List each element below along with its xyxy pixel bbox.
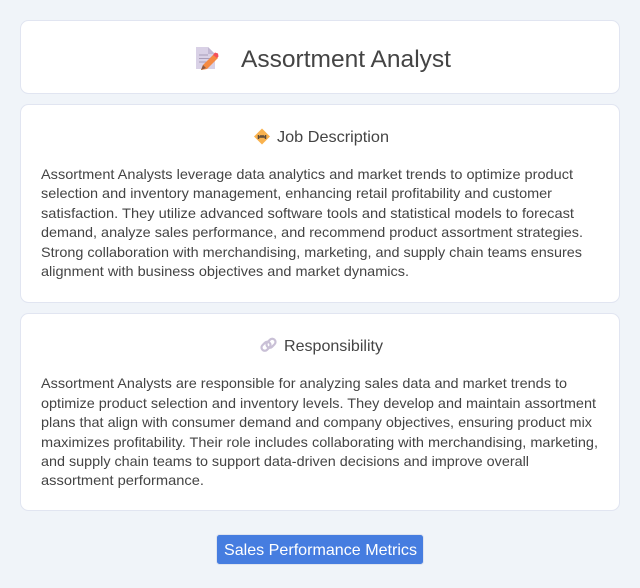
- text block: job description: [41, 166, 583, 279]
- button: sales performance metrics: [216, 534, 424, 564]
- text block: responsibility: Assortment Analysts are responsible for analyzing sales data and market trends to: [41, 375, 567, 391]
- text block: responsibility: [41, 375, 598, 488]
- icon: chain link: [260, 337, 277, 352]
- icon: diamond sign: [254, 128, 270, 144]
- panel: responsibility: [20, 314, 620, 510]
- text block: job description: demand, analyze sales performance, and recommend product assortment strategies.: [41, 224, 583, 240]
- heading: page title: Assortment Analyst: [241, 46, 451, 73]
- icon: document with pencil: [196, 47, 218, 70]
- text block: job description: satisfaction. They utilize advanced software tools and statistical models to forecast: [41, 205, 574, 221]
- text block: responsibility: plans that align with consumer demand and company objectives, ensuring product mix: [41, 414, 592, 430]
- text block: responsibility: assortment performance.: [41, 472, 204, 488]
- text block: responsibility: maximizes profitability. Their role includes collaborating with merchandising, marketing,: [41, 434, 598, 450]
- button: sales performance metrics: Sales Performance Metrics: [224, 542, 417, 559]
- text block: responsibility: optimize product selection and inventory levels. They develop and maintain assortment: [41, 395, 596, 411]
- panel: job description: [20, 104, 620, 302]
- heading: job description: Job Description: [277, 129, 389, 146]
- text block: job description: Strong collaboration with merchandising, marketing, and supply chain teams ensures: [41, 244, 582, 260]
- text block: job description: alignment with business objectives and market dynamics.: [41, 263, 409, 279]
- text block: responsibility: and supply chain teams to support data-driven decisions and improve overall: [41, 453, 529, 469]
- text block: job description: Assortment Analysts leverage data analytics and market trends to optimize product: [41, 166, 573, 182]
- heading: responsibility: Responsibility: [284, 338, 383, 355]
- text block: job description: selection and inventory management, enhancing retail profitability and customer: [41, 185, 552, 201]
- panel: title: [20, 20, 620, 94]
